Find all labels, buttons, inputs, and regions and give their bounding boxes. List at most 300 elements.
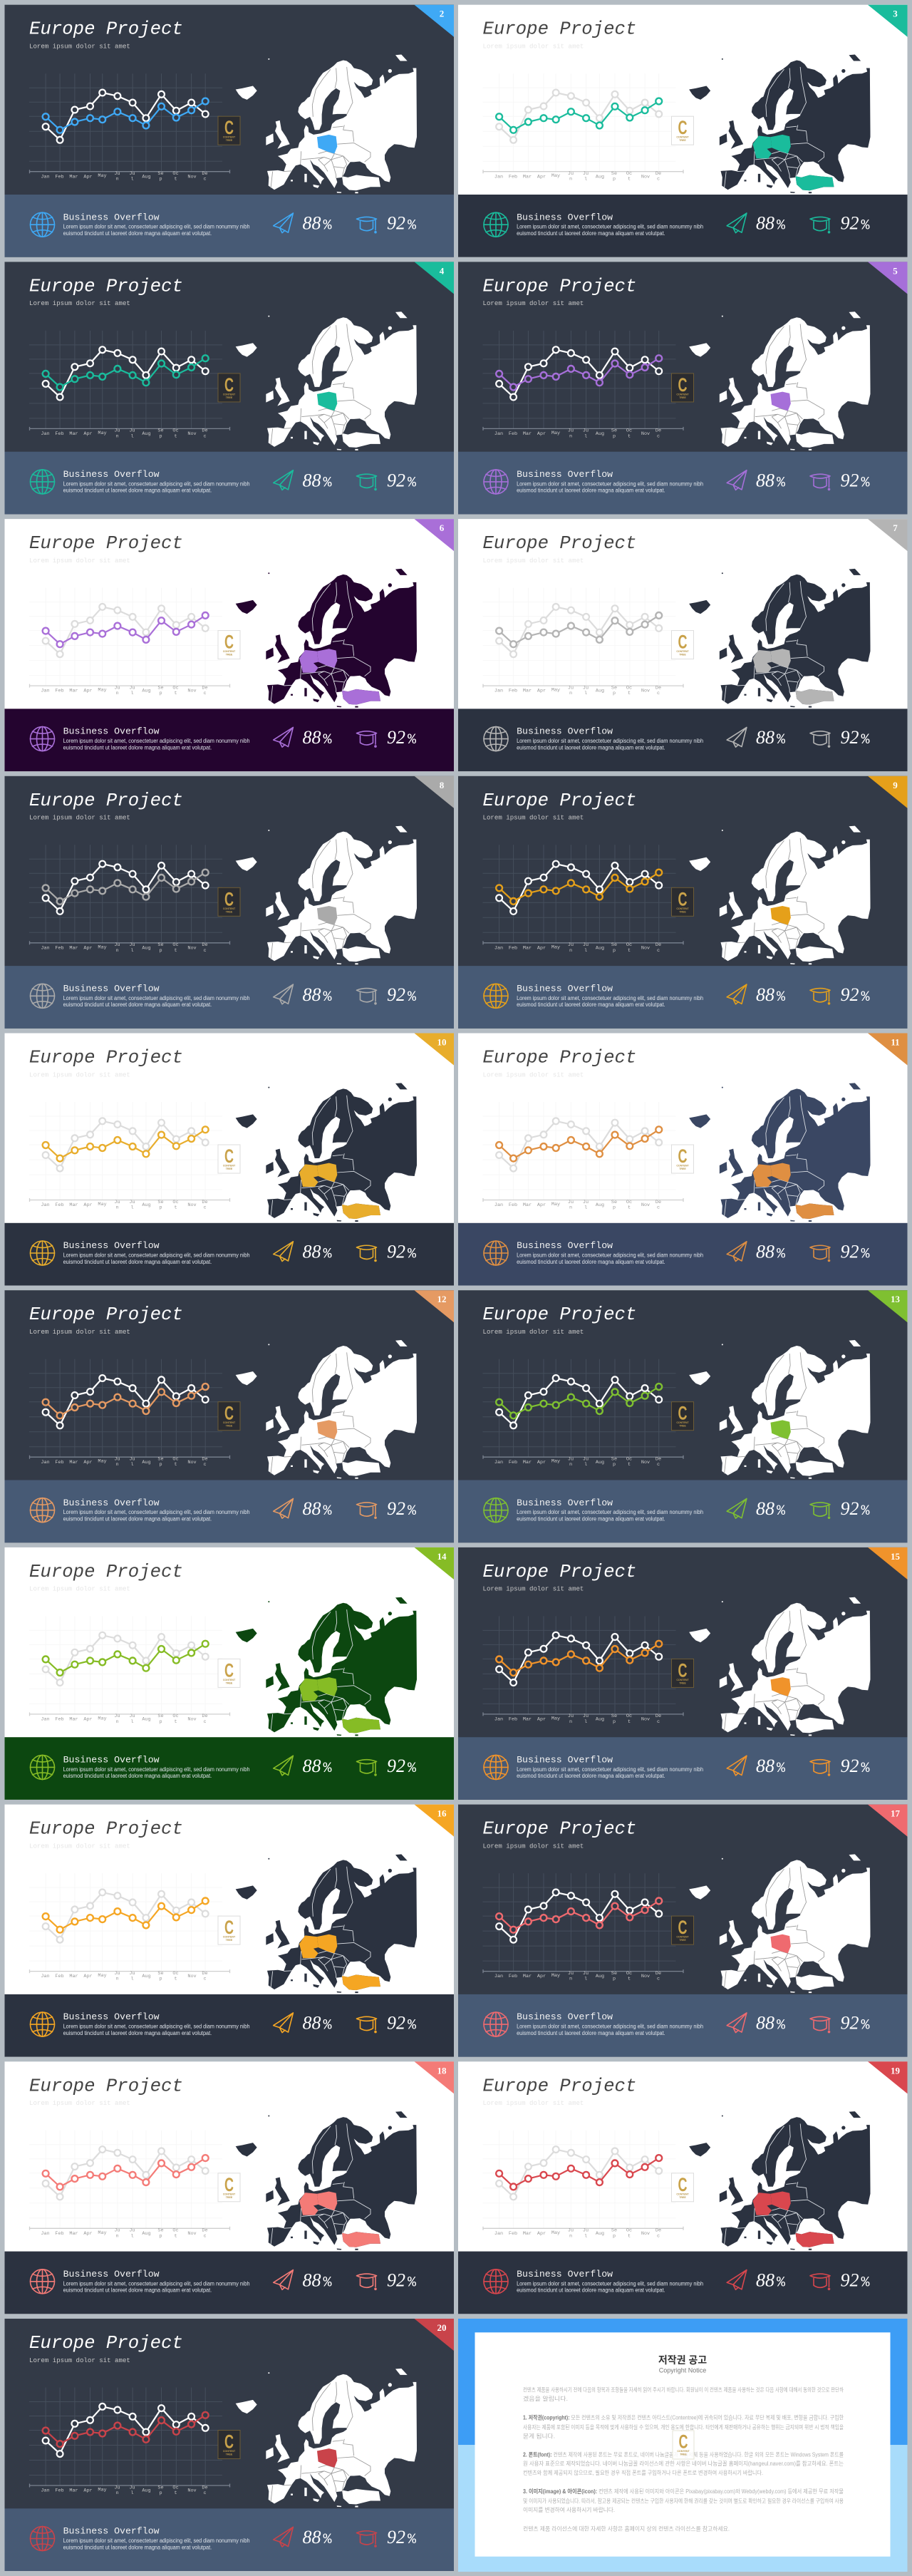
- line chart: Mar: [523, 1974, 532, 1979]
- line chart: Feb: [55, 431, 64, 437]
- icon: globe: [484, 1498, 508, 1523]
- footer text: Lorem ipsum dolor sit amet, consectetuer adipiscing elit, sed diam nonummy nibh: [63, 480, 250, 487]
- line chart: Mar: [523, 1460, 532, 1465]
- line chart: Ju: [583, 1971, 589, 1977]
- footer text: euismod tincidunt ut laoreet dolore magna aliquam erat volutpat.: [517, 1773, 665, 1779]
- line chart: De: [202, 428, 208, 434]
- line chart: Ju: [129, 171, 135, 177]
- footer text: Lorem ipsum dolor sit amet, consectetuer adipiscing elit, sed diam nonummy nibh: [517, 1766, 703, 1773]
- line chart: p: [613, 691, 616, 696]
- icon: globe: [484, 2270, 508, 2294]
- badge: [218, 1402, 240, 1431]
- badge: [218, 1916, 240, 1944]
- line chart: Ju: [129, 1971, 135, 1977]
- subtitle: Lorem ipsum dolor sit amet: [29, 1585, 130, 1593]
- line chart: Aug: [142, 1716, 151, 1722]
- title: Europe Project: [483, 533, 636, 554]
- line chart: Se: [157, 1200, 164, 1205]
- footer bar: [4, 2508, 454, 2571]
- badge: CONTENT: [676, 1165, 689, 1168]
- line chart: Nov: [187, 945, 197, 951]
- line chart: p: [613, 1977, 616, 1982]
- panel: slide 5: [458, 262, 908, 514]
- page number tab: 18: [437, 2065, 447, 2076]
- line chart: May: [98, 1459, 107, 1465]
- line chart: Mar: [69, 1460, 78, 1465]
- line chart: Ju: [583, 171, 589, 177]
- map of Europe: [236, 569, 417, 708]
- line chart: c: [203, 2233, 207, 2239]
- icon: graduation cap: [356, 1503, 376, 1518]
- footer bar: [458, 195, 908, 257]
- line chart: Jan: [41, 2231, 50, 2237]
- page number tab: [415, 1034, 454, 1065]
- line chart: p: [159, 948, 162, 954]
- footer bar: [458, 452, 908, 514]
- icon: globe: [30, 2526, 54, 2550]
- badge: [218, 887, 240, 916]
- footer text: Lorem ipsum dolor sit amet, consectetuer adipiscing elit, sed diam nonummy nibh: [63, 2538, 250, 2544]
- line chart: Feb: [55, 174, 64, 180]
- footer bar: [458, 1737, 908, 1800]
- stat 92%: 92%: [387, 1756, 417, 1777]
- panel: slide 16: [4, 1805, 454, 2057]
- icon: globe: [484, 1241, 508, 1265]
- line chart: Mar: [523, 1716, 532, 1722]
- footer text: euismod tincidunt ut laoreet dolore magna aliquam erat volutpat.: [63, 2287, 212, 2294]
- line chart: Apr: [537, 1202, 546, 1208]
- icon: graduation cap: [810, 989, 830, 1004]
- badge: C: [678, 2431, 688, 2452]
- line chart: Mar: [69, 431, 78, 437]
- line chart: Oc: [626, 1457, 632, 1463]
- line chart: Jan: [41, 1460, 50, 1465]
- footer text: Lorem ipsum dolor sit amet, consectetuer adipiscing elit, sed diam nonummy nibh: [517, 2280, 703, 2287]
- line chart: t: [174, 433, 177, 439]
- page number tab: 11: [891, 1036, 900, 1048]
- footer text: Business Overflow: [517, 2011, 613, 2022]
- line chart: Jan: [494, 1460, 503, 1465]
- subtitle: Lorem ipsum dolor sit amet: [483, 2099, 584, 2107]
- line chart: Nov: [187, 689, 197, 694]
- title: Europe Project: [483, 276, 636, 297]
- badge: [671, 373, 694, 402]
- line chart: c: [657, 1719, 660, 1725]
- line chart: Ju: [129, 1714, 135, 1719]
- line chart: [29, 2388, 229, 2496]
- line chart: t: [628, 691, 631, 696]
- page number tab: [868, 519, 908, 551]
- map of Europe: [236, 2111, 417, 2250]
- line chart: Ju: [129, 2228, 135, 2234]
- line chart: l: [130, 433, 134, 439]
- map of Europe: [236, 826, 417, 964]
- footer text: euismod tincidunt ut laoreet dolore magna aliquam erat volutpat.: [517, 2030, 665, 2036]
- line chart: l: [584, 1977, 587, 1982]
- footer text: Business Overflow: [63, 1498, 160, 1508]
- icon: graduation cap: [810, 731, 830, 747]
- footer text: [63, 983, 250, 1008]
- badge: CONTENT: [676, 907, 689, 910]
- panel: slide 9: [458, 776, 908, 1029]
- line chart: Nov: [641, 1202, 650, 1208]
- badge: C: [224, 2174, 234, 2195]
- line chart: May: [98, 944, 107, 950]
- line chart: [29, 1359, 229, 1468]
- line chart: Apr: [537, 1716, 546, 1722]
- line chart: [29, 2131, 229, 2239]
- line chart: l: [130, 691, 134, 696]
- footer text: euismod tincidunt ut laoreet dolore magna aliquam erat volutpat.: [63, 2030, 212, 2036]
- stat 88%: 88%: [756, 984, 786, 1006]
- badge: C: [678, 1659, 687, 1681]
- subtitle: Lorem ipsum dolor sit amet: [29, 2099, 130, 2107]
- line chart: [29, 1873, 229, 1982]
- line chart: Oc: [626, 1200, 632, 1205]
- icon: globe: [484, 727, 508, 751]
- line chart: t: [174, 1462, 177, 1468]
- icon: paper plane: [727, 2270, 747, 2289]
- line chart: Aug: [142, 1974, 151, 1979]
- line chart: p: [613, 1205, 616, 1210]
- footer text: Business Overflow: [517, 469, 613, 480]
- footer text: [517, 983, 703, 1008]
- stat 92%: 92%: [387, 2013, 417, 2034]
- line chart: Nov: [187, 431, 197, 437]
- icon: paper plane: [727, 1756, 747, 1776]
- panel: slide 19: [458, 2061, 908, 2314]
- title: Europe Project: [483, 1304, 636, 1325]
- line chart: Nov: [641, 1974, 650, 1979]
- copyright body text: 이미지를 변경하여 사용하시기 바랍니다.: [523, 2506, 615, 2513]
- line chart: [29, 73, 229, 182]
- badge: TREE: [226, 910, 233, 913]
- line chart: l: [130, 1205, 134, 1210]
- line chart: l: [584, 691, 587, 696]
- subtitle: Lorem ipsum dolor sit amet: [483, 1585, 584, 1593]
- badge: C: [678, 632, 687, 653]
- line chart: Aug: [596, 1974, 604, 1979]
- footer bar: [4, 1223, 454, 1286]
- title: Europe Project: [29, 1819, 183, 1840]
- footer text: Business Overflow: [63, 983, 160, 994]
- line chart: t: [628, 1462, 631, 1468]
- line chart: t: [628, 2233, 631, 2239]
- page number tab: [868, 1034, 908, 1065]
- line chart: Nov: [187, 2488, 197, 2494]
- badge: [673, 2431, 694, 2459]
- footer text: euismod tincidunt ut laoreet dolore magna aliquam erat volutpat.: [517, 230, 665, 237]
- stat 92%: 92%: [841, 1498, 871, 1520]
- line chart: May: [98, 173, 107, 179]
- icon: paper plane: [727, 1498, 747, 1518]
- footer text: [517, 2269, 703, 2294]
- page number tab: 19: [891, 2065, 901, 2076]
- stat 88%: 88%: [756, 1242, 786, 1263]
- line chart: Oc: [172, 942, 179, 948]
- badge: CONTENT: [676, 1679, 689, 1681]
- stat 92%: 92%: [841, 2013, 871, 2034]
- icon: graduation cap: [810, 1503, 830, 1518]
- line chart: l: [584, 433, 587, 439]
- line chart: Se: [611, 685, 617, 691]
- footer text: Business Overflow: [517, 212, 613, 222]
- copyright body text: 및 이미지가 사용되었습니다. 따라서, 참고용 제공되는 컨텐츠는 구입한 사용자에 한해 권리를 갖는 것이며 별도로 확인하고 필요한 경우 라이선스를 구입하여 사용: [523, 2497, 844, 2504]
- line chart: Ju: [129, 428, 135, 434]
- footer text: Lorem ipsum dolor sit amet, consectetuer adipiscing elit, sed diam nonummy nibh: [63, 2280, 250, 2287]
- badge: TREE: [226, 1425, 233, 1428]
- stat 92%: 92%: [387, 2527, 417, 2548]
- footer text: Business Overflow: [517, 726, 613, 737]
- badge: CONTENT: [223, 136, 236, 139]
- page number tab: 9: [893, 780, 898, 790]
- footer bar: [4, 195, 454, 257]
- badge: CONTENT: [676, 650, 689, 653]
- line chart: De: [656, 685, 661, 691]
- badge: TREE: [226, 654, 233, 656]
- line chart: Ju: [114, 1971, 120, 1977]
- line chart: May: [98, 1202, 107, 1207]
- footer text: [63, 1498, 250, 1523]
- badge: TREE: [679, 1425, 686, 1428]
- line chart: Jan: [41, 689, 50, 694]
- line chart: Ju: [568, 685, 574, 691]
- badge: CONTENT: [676, 393, 689, 396]
- line chart: De: [202, 942, 208, 948]
- line chart: De: [202, 2485, 208, 2490]
- stat 92%: 92%: [841, 1242, 871, 1263]
- line chart: Oc: [626, 1714, 632, 1719]
- line chart: Se: [611, 1714, 617, 1719]
- footer text: [517, 1240, 703, 1265]
- footer text: Lorem ipsum dolor sit amet, consectetuer adipiscing elit, sed diam nonummy nibh: [517, 224, 703, 230]
- line chart: Ju: [568, 428, 574, 434]
- map of Europe: [236, 1083, 417, 1222]
- line chart: l: [130, 1462, 134, 1468]
- footer text: Lorem ipsum dolor sit amet, consectetuer adipiscing elit, sed diam nonummy nibh: [63, 995, 250, 1001]
- badge: TREE: [226, 1168, 233, 1170]
- line chart: l: [584, 948, 587, 954]
- line chart: Nov: [187, 2231, 197, 2237]
- icon: globe: [484, 212, 508, 237]
- stat 88%: 88%: [756, 727, 786, 748]
- line chart: Ju: [114, 942, 120, 948]
- badge: [671, 887, 694, 916]
- footer text: euismod tincidunt ut laoreet dolore magna aliquam erat volutpat.: [63, 744, 212, 751]
- line chart: Se: [611, 1200, 617, 1205]
- line chart: Mar: [523, 945, 532, 951]
- footer bar: [4, 452, 454, 514]
- line chart: t: [174, 1205, 177, 1210]
- line chart: Nov: [641, 945, 650, 951]
- line chart: Ju: [114, 171, 120, 177]
- map of Europe: [236, 1340, 417, 1479]
- page number tab: [415, 776, 454, 808]
- map of Europe: [689, 569, 870, 708]
- line chart: Oc: [172, 2228, 179, 2234]
- line chart: c: [203, 1205, 207, 1210]
- line chart: May: [98, 1716, 107, 1721]
- footer text: Lorem ipsum dolor sit amet, consectetuer adipiscing elit, sed diam nonummy nibh: [517, 738, 703, 744]
- subtitle: Lorem ipsum dolor sit amet: [483, 299, 584, 307]
- line chart: Mar: [69, 1716, 78, 1722]
- line chart: Feb: [55, 1716, 64, 1722]
- icon: graduation cap: [356, 731, 376, 747]
- line chart: n: [569, 1719, 572, 1725]
- icon: paper plane: [274, 727, 293, 747]
- line chart: De: [202, 171, 208, 177]
- line chart: n: [569, 1205, 572, 1210]
- footer bar: [458, 1994, 908, 2057]
- line chart: Ju: [114, 685, 120, 691]
- line chart: Aug: [596, 945, 604, 951]
- line chart: Apr: [83, 1202, 93, 1208]
- line chart: [483, 73, 683, 182]
- line chart: Oc: [626, 942, 632, 948]
- footer text: euismod tincidunt ut laoreet dolore magna aliquam erat volutpat.: [517, 1515, 665, 1522]
- line chart: Jan: [494, 1974, 503, 1979]
- page number tab: 2: [440, 9, 444, 19]
- line chart: p: [613, 177, 616, 182]
- line chart: Se: [157, 1714, 164, 1719]
- line chart: Ju: [583, 1457, 589, 1463]
- line chart: Aug: [142, 2231, 151, 2237]
- line chart: l: [130, 2490, 134, 2496]
- line chart: n: [115, 177, 119, 182]
- line chart: Nov: [641, 174, 650, 180]
- footer text: Lorem ipsum dolor sit amet, consectetuer adipiscing elit, sed diam nonummy nibh: [517, 480, 703, 487]
- icon: paper plane: [274, 1756, 293, 1776]
- line chart: [483, 1359, 683, 1468]
- icon: graduation cap: [356, 217, 376, 233]
- title: Europe Project: [29, 790, 183, 811]
- line chart: p: [159, 1462, 162, 1468]
- line chart: p: [613, 433, 616, 439]
- badge: TREE: [679, 396, 686, 399]
- stat 92%: 92%: [387, 1498, 417, 1520]
- icon: graduation cap: [810, 2016, 830, 2033]
- line chart: Ju: [114, 2228, 120, 2234]
- line chart: Aug: [142, 174, 151, 180]
- line chart: De: [202, 2228, 208, 2234]
- badge: CONTENT: [223, 1679, 236, 1681]
- line chart: Apr: [537, 2231, 546, 2237]
- map of Europe: [236, 1597, 417, 1736]
- line chart: Oc: [626, 428, 632, 434]
- line chart: Jan: [494, 431, 503, 437]
- line chart: De: [656, 1714, 661, 1719]
- footer text: [517, 469, 703, 494]
- stat 88%: 88%: [302, 213, 332, 235]
- line chart: May: [551, 1716, 560, 1721]
- footer text: euismod tincidunt ut laoreet dolore magna aliquam erat volutpat.: [63, 2544, 212, 2550]
- line chart: Apr: [83, 1716, 93, 1722]
- subtitle: Lorem ipsum dolor sit amet: [29, 557, 130, 565]
- page number tab: [868, 776, 908, 808]
- badge: [671, 116, 694, 145]
- line chart: De: [656, 171, 661, 177]
- icon: globe: [30, 1498, 54, 1523]
- line chart: t: [174, 177, 177, 182]
- line chart: [483, 2131, 683, 2239]
- line chart: Apr: [83, 1974, 93, 1979]
- page number tab: [868, 1290, 908, 1322]
- line chart: Mar: [69, 1974, 78, 1979]
- line chart: [483, 1873, 683, 1982]
- footer text: Business Overflow: [63, 726, 160, 737]
- footer text: Business Overflow: [63, 2526, 160, 2537]
- badge: [671, 631, 694, 659]
- copyright body text: 컨텐츠 제품을 사용하시기 전에 다음의 항목과 조항들을 자세히 읽어 주시기 바랍니다. 회원님이 이 컨텐츠 제품을 사용하는 것은 다음 사항에 대해서 동의한 것으로 판단하: [523, 2386, 844, 2393]
- badge: C: [678, 888, 687, 910]
- icon: graduation cap: [356, 474, 376, 490]
- line chart: Nov: [641, 689, 650, 694]
- line chart: Mar: [523, 1202, 532, 1208]
- stat 92%: 92%: [841, 470, 871, 491]
- line chart: Mar: [523, 431, 532, 437]
- badge: C: [678, 1145, 687, 1167]
- line chart: Feb: [509, 2231, 517, 2237]
- line chart: De: [202, 1971, 208, 1977]
- copyright body text: 2. 폰트(font): 컨텐츠 제작에 사용된 폰트는 무료 폰트로, 네이버 나눔글꼴과 서울서체 등을 사용하였습니다. 한글 외의 모든 폰트는 Windows System 폰트를: [523, 2451, 844, 2458]
- line chart: Jan: [494, 2231, 503, 2237]
- subtitle: Lorem ipsum dolor sit amet: [29, 1328, 130, 1336]
- line chart: n: [569, 948, 572, 954]
- map of Europe: [689, 1854, 870, 1993]
- footer text: Business Overflow: [63, 469, 160, 480]
- line chart: Oc: [626, 685, 632, 691]
- badge: TREE: [679, 1168, 686, 1170]
- title: Europe Project: [483, 1562, 636, 1582]
- panel: slide 11: [458, 1034, 908, 1286]
- panel: slide 2: [4, 5, 454, 257]
- badge: C: [224, 374, 234, 396]
- line chart: l: [584, 1719, 587, 1725]
- line chart: Ju: [114, 1200, 120, 1205]
- footer text: Lorem ipsum dolor sit amet, consectetuer adipiscing elit, sed diam nonummy nibh: [517, 2024, 703, 2030]
- line chart: l: [584, 1462, 587, 1468]
- icon: paper plane: [274, 1498, 293, 1518]
- panel: slide 7: [458, 519, 908, 771]
- page number tab: 7: [893, 522, 898, 533]
- line chart: Ju: [568, 1714, 574, 1719]
- panel: slide 13: [458, 1290, 908, 1542]
- panel: slide 4: [4, 262, 454, 514]
- title: Europe Project: [29, 19, 183, 40]
- badge: C: [678, 1917, 687, 1938]
- icon: paper plane: [274, 984, 293, 1004]
- icon: graduation cap: [810, 1245, 830, 1262]
- stat 88%: 88%: [302, 2270, 332, 2291]
- footer text: euismod tincidunt ut laoreet dolore magna aliquam erat volutpat.: [63, 230, 212, 237]
- line chart: Ju: [568, 1457, 574, 1463]
- line chart: Nov: [641, 431, 650, 437]
- line chart: Apr: [83, 945, 93, 951]
- icon: globe: [484, 984, 508, 1008]
- line chart: Aug: [596, 2231, 604, 2237]
- footer text: [517, 1498, 703, 1523]
- line chart: [29, 331, 229, 439]
- line chart: May: [551, 1202, 560, 1207]
- footer text: Business Overflow: [517, 1754, 613, 1765]
- line chart: n: [569, 1462, 572, 1468]
- line chart: l: [584, 2233, 587, 2239]
- badge: C: [678, 374, 687, 396]
- icon: paper plane: [274, 1242, 293, 1262]
- footer text: euismod tincidunt ut laoreet dolore magna aliquam erat volutpat.: [63, 1773, 212, 1779]
- line chart: Aug: [142, 945, 151, 951]
- subtitle: Lorem ipsum dolor sit amet: [483, 1328, 584, 1336]
